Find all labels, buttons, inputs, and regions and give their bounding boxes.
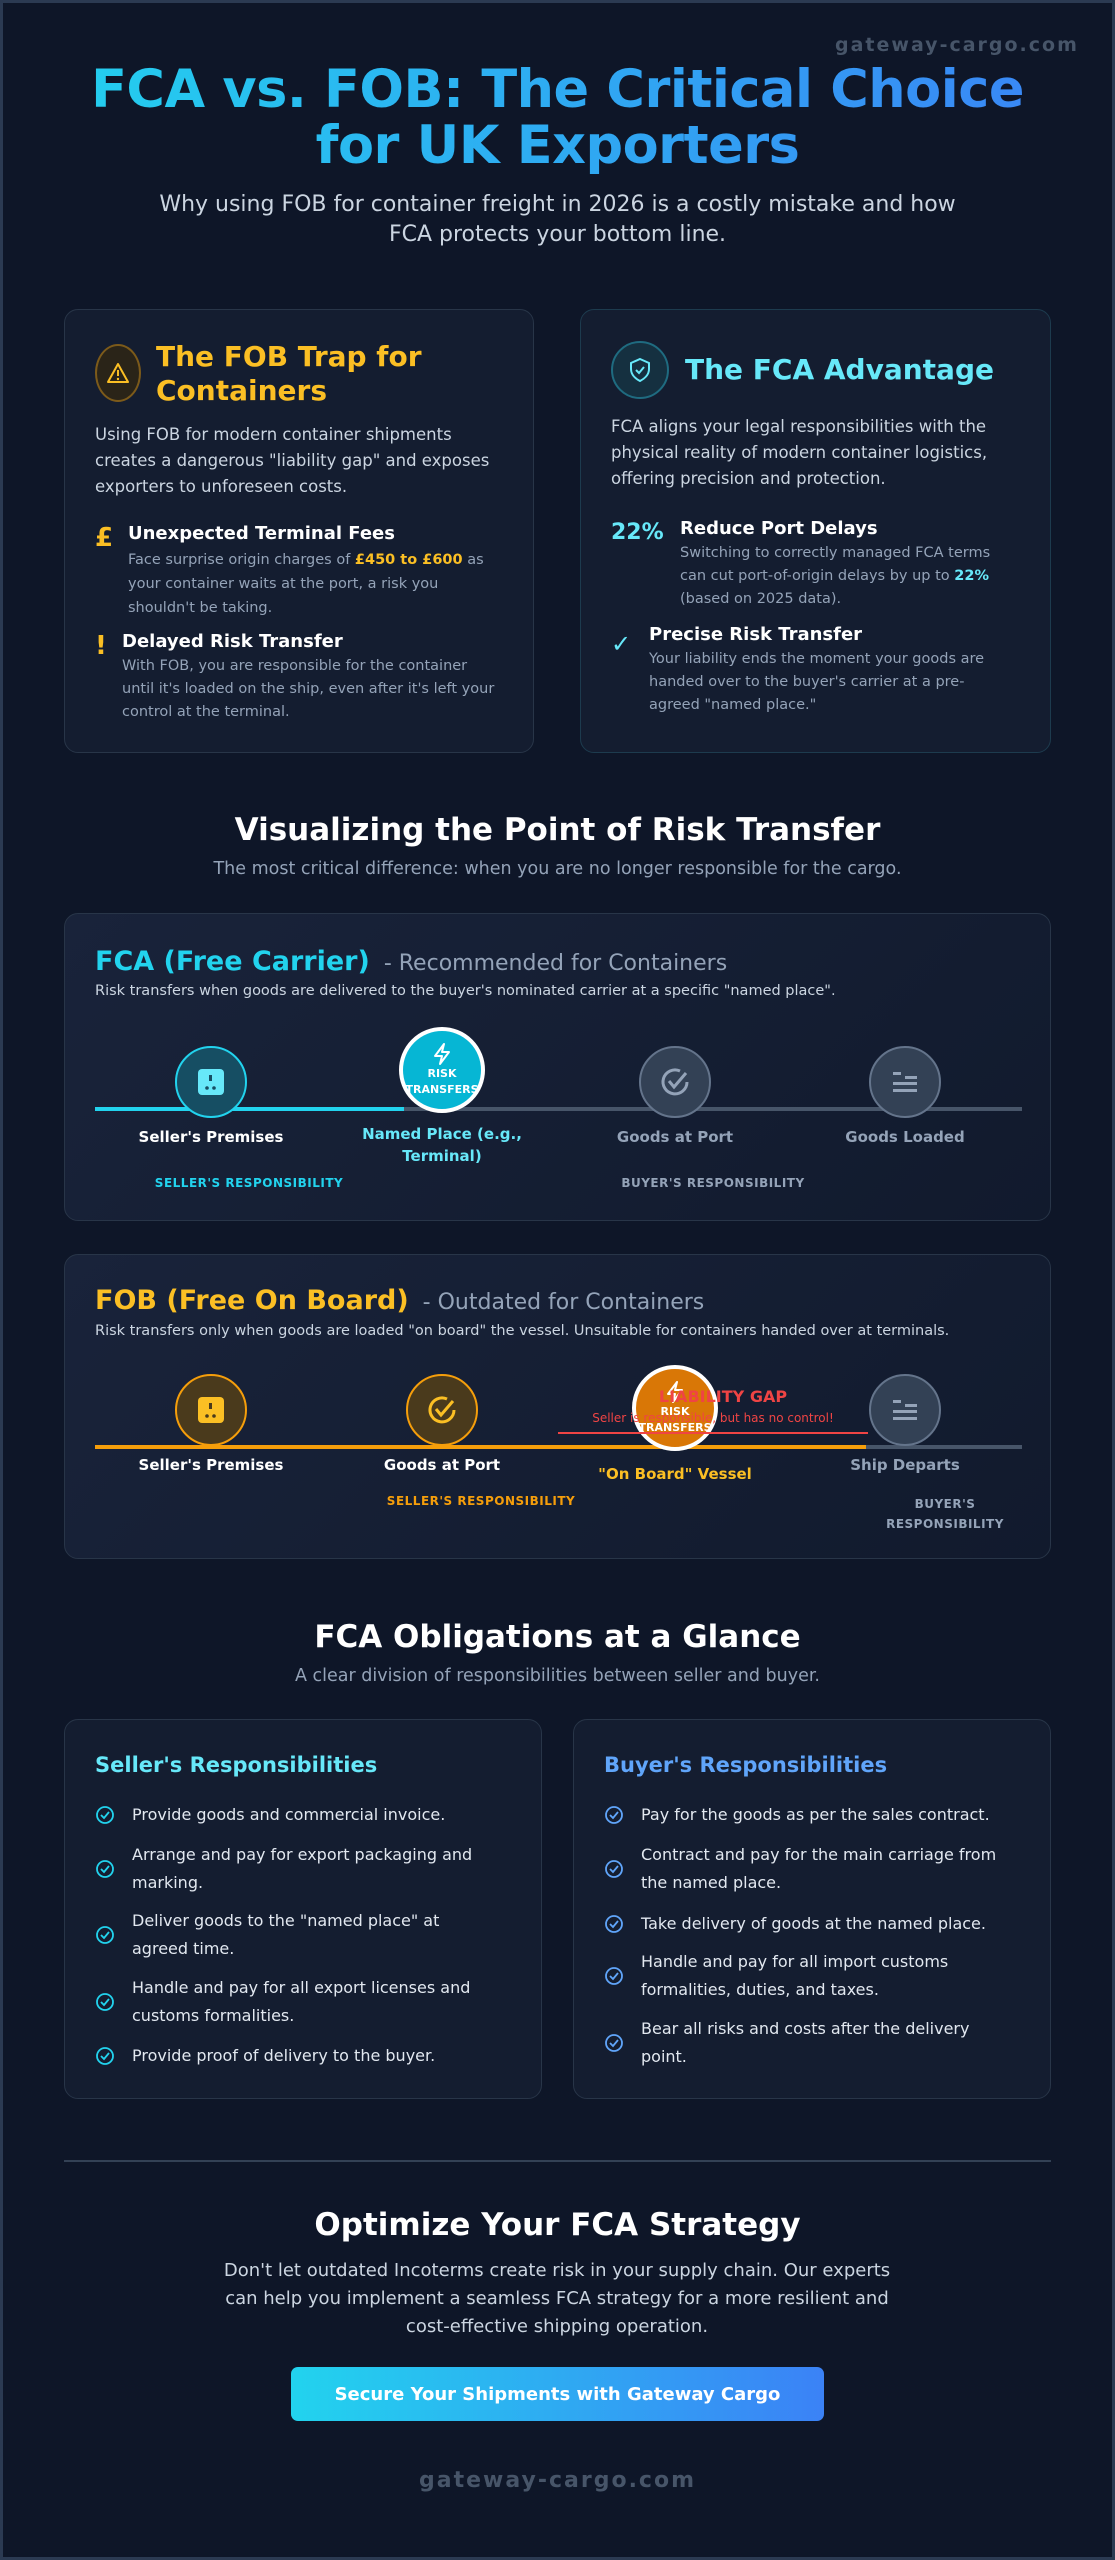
point: fees: £ [95, 523, 113, 553]
heading [156, 340, 422, 407]
panel: FCA timeline [64, 913, 1051, 1221]
panel: FOB trap [64, 309, 534, 753]
panel: seller's responsibilities: Provide goods and commercial invoice. [132, 1805, 445, 1824]
CTA text: cost-effective shipping operation. [406, 2316, 708, 2337]
node: ship departs [869, 1374, 941, 1446]
title [0, 62, 1115, 174]
panel: FCA timeline: Named Place (e.g., [362, 1125, 522, 1143]
node: risk transfers [399, 1027, 485, 1113]
callout: liability gap: LIABILITY GAP [659, 1387, 787, 1406]
timeline line [95, 1107, 1022, 1111]
point: precise risk: Precise Risk Transfer [649, 624, 862, 645]
subtitle: FCA protects your bottom line. [389, 222, 726, 247]
node: risk transfers: RISK [660, 1405, 690, 1418]
text: FCA aligns your legal responsibilities with the physical reality of modern container logistics, offering precision and protection. [611, 417, 987, 488]
node: risk transfers [632, 1365, 718, 1451]
panel: FOB timeline: RESPONSIBILITY [886, 1517, 1004, 1531]
callout: liability gap: Seller is responsible, but has no control! [592, 1411, 834, 1425]
icon: shield [611, 341, 669, 399]
heading: Containers [156, 374, 327, 407]
panel: buyer's responsibilities [573, 1719, 1051, 2099]
CTA text [224, 2260, 890, 2337]
button: Secure Your Shipments with Gateway Cargo [335, 2384, 780, 2404]
panel: buyer's responsibilities: Take delivery of goods at the named place. [641, 1914, 986, 1933]
panel: seller's responsibilities: Provide proof of delivery to the buyer. [132, 2046, 435, 2065]
labels: Seller's Premises [139, 1456, 283, 1474]
description: Risk transfers when goods are delivered to the buyer's nominated carrier at a specific "named place". [95, 983, 836, 999]
node: risk transfers: TRANSFERS [405, 1083, 479, 1096]
responsibility labels: SELLER'S RESPONSIBILITY [155, 1176, 343, 1190]
heading: optimize: Optimize Your FCA Strategy [314, 2207, 801, 2243]
point: delayed risk: ! [95, 631, 107, 661]
subtitle [159, 192, 956, 247]
point: precise risk [611, 624, 984, 713]
panel: FCA timeline: BUYER'S RESPONSIBILITY [621, 1176, 805, 1190]
timeline line [95, 1445, 1022, 1449]
labels: Seller's Premises [139, 1128, 283, 1146]
CTA text: can help you implement a seamless FCA strategy for a more resilient and [225, 2288, 889, 2309]
node: goods at port [639, 1046, 711, 1118]
title: FCA vs. FOB: The Critical Choice [91, 59, 1024, 120]
node: seller's premises [175, 1046, 247, 1118]
point: precise risk: Your liability ends the moment your goods are handed over to the buyer's carrier at a pre-agreed "named place." [649, 651, 984, 713]
node: risk transfers: TRANSFERS [638, 1421, 712, 1434]
panel: buyer's responsibilities: Pay for the goods as per the sales contract. [641, 1805, 990, 1824]
panel: FCA timeline: Terminal) [402, 1147, 482, 1165]
panel: buyer's responsibilities: the named place. [641, 1873, 781, 1892]
watermark top: gateway-cargo.com [835, 34, 1079, 56]
heading: visualizing: Visualizing the Point of Risk Transfer [235, 812, 880, 848]
node: seller's premises [175, 1374, 247, 1446]
panel: FOB timeline: Ship Departs [850, 1456, 960, 1474]
responsibility labels: SELLER'S RESPONSIBILITY [387, 1494, 575, 1508]
point: fees [95, 523, 484, 616]
panel: FOB timeline: Goods at Port [384, 1456, 500, 1474]
text: Using FOB for modern container shipments creates a dangerous "liability gap" and exposes exporters to unforeseen costs. [95, 425, 489, 496]
title: FOB (Free On Board) - Outdated for Containers [95, 1285, 704, 1316]
panel: seller's responsibilities: Seller's Responsibilities [95, 1753, 377, 1777]
point: delayed risk: With FOB, you are responsible for the container [122, 658, 467, 674]
icon: warning [95, 344, 141, 402]
subheading: The most critical difference: when you are no longer responsible for the cargo. [213, 859, 902, 879]
node: goods at port [406, 1374, 478, 1446]
title: FCA (Free Carrier) - Recommended for Containers [95, 946, 727, 977]
description: Risk transfers only when goods are loaded "on board" the vessel. Unsuitable for containers handed over at terminals. [95, 1323, 949, 1339]
node: goods loaded [869, 1046, 941, 1118]
panel: seller's responsibilities [64, 1719, 542, 2099]
panel: buyer's responsibilities: Bear all risks and costs after the delivery point. [641, 2019, 969, 2066]
point: port delays: 22% [611, 520, 664, 545]
panel: FCA timeline: Goods Loaded [845, 1128, 965, 1146]
subheading: A clear division of responsibilities between seller and buyer. [295, 1666, 820, 1686]
title: for UK Exporters [316, 115, 799, 176]
panel: FCA advantage [580, 309, 1051, 753]
heading: The FCA Advantage [685, 353, 994, 386]
point: fees: Unexpected Terminal Fees [128, 523, 395, 544]
callout: liability gap [558, 1387, 868, 1434]
panel: seller's responsibilities: Handle and pay for all export licenses and customs formalities. [132, 1978, 470, 2025]
footer watermark: gateway-cargo.com [419, 2468, 696, 2493]
node: risk transfers: RISK [427, 1067, 456, 1080]
heading: The FOB Trap for [156, 340, 422, 373]
point: port delays [611, 518, 990, 607]
CTA text: Don't let outdated Incoterms create risk in your supply chain. Our experts [224, 2260, 890, 2281]
point: port delays: Switching to correctly managed FCA terms can cut port-of-origin delays by up to 22% (based on 2025 data). [680, 545, 990, 607]
point: fees: Face surprise origin charges of £450 to £600 as your container waits at the port, a risk you shouldn't be taking. [128, 552, 484, 616]
point: delayed risk: until it's loaded on the ship, even after it's left your control at the terminal. [122, 681, 494, 720]
point: delayed risk: Delayed Risk Transfer [122, 631, 343, 652]
panel: FOB timeline: "On Board" Vessel [598, 1465, 752, 1483]
panel: FCA timeline: Goods at Port [617, 1128, 733, 1146]
point: precise risk: ✓ [611, 630, 631, 658]
panel: FOB timeline: BUYER'S [915, 1497, 975, 1511]
button [291, 2367, 824, 2421]
panel: seller's responsibilities: Deliver goods to the "named place" at agreed time. [132, 1911, 439, 1958]
panel: buyer's responsibilities: Handle and pay for all import customs formalities, duties, and taxes. [641, 1952, 948, 1999]
panel: seller's responsibilities: Arrange and pay for export packaging and marking. [132, 1845, 472, 1892]
point: delayed risk [95, 631, 494, 720]
subtitle: Why using FOB for container freight in 2026 is a costly mistake and how [159, 192, 956, 217]
panel: buyer's responsibilities: Buyer's Responsibilities [604, 1753, 887, 1777]
point: port delays: Reduce Port Delays [680, 518, 878, 539]
heading: obligations: FCA Obligations at a Glance [314, 1619, 801, 1655]
panel: FOB timeline [64, 1254, 1051, 1559]
panel: buyer's responsibilities: Contract and pay for the main carriage from [641, 1845, 996, 1864]
